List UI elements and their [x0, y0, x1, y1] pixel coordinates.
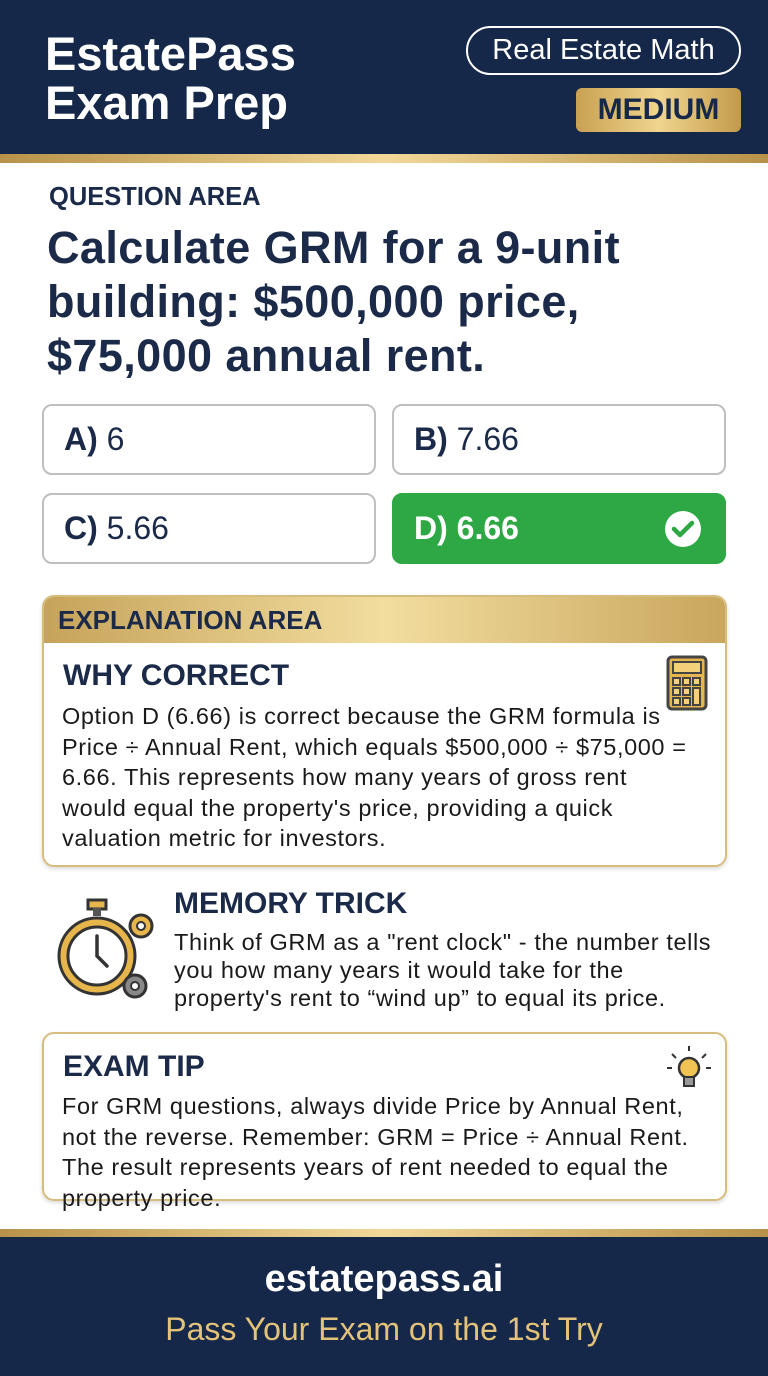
text: exam tip body: property price. [62, 1184, 221, 1210]
text: memory trick body: property's rent to “wind up” to equal its price. [174, 985, 666, 1011]
option A: A) 6 [64, 421, 124, 457]
option B [392, 404, 726, 475]
badge: MEDIUM: MEDIUM [598, 93, 719, 126]
text: exam tip body: not the reverse. Remember: GRM = Price ÷ Annual Rent. [62, 1124, 689, 1150]
panel: exam tip [42, 1032, 727, 1201]
text: why correct body: valuation metric for investors. [62, 825, 386, 851]
text: memory trick body: Think of GRM as a "rent clock" - the number tells [174, 929, 711, 955]
text: memory trick body: you how many years it would take for the [174, 957, 624, 983]
text: exam tip body [62, 1093, 689, 1211]
heading: explanation area: EXPLANATION AREA [58, 605, 322, 635]
footer [0, 1229, 768, 1376]
icon: lightbulb [667, 1046, 711, 1087]
header [0, 0, 768, 163]
heading: question area: QUESTION AREA [49, 183, 261, 211]
heading: why correct: WHY CORRECT [63, 659, 289, 692]
footer: tagline: Pass Your Exam on the 1st Try [165, 1311, 603, 1347]
heading: memory trick: MEMORY TRICK [174, 887, 407, 920]
option D correct [392, 493, 726, 564]
title [45, 27, 296, 129]
text: why correct body: Price ÷ Annual Rent, which equals $500,000 ÷ $75,000 = [62, 734, 687, 760]
text: why correct body: would equal the property's price, providing a quick [62, 794, 613, 820]
text: why correct body: Option D (6.66) is correct because the GRM formula is [62, 703, 661, 729]
heading: exam tip: EXAM TIP [63, 1050, 205, 1083]
text: why correct body [62, 703, 687, 851]
question text: Calculate GRM for a 9-unit [47, 222, 620, 273]
icon: calculator [666, 656, 708, 710]
text: exam tip body: The result represents years of rent needed to equal the [62, 1154, 668, 1180]
option A [42, 404, 376, 475]
question text [47, 222, 620, 381]
icon: stopwatch [58, 898, 154, 998]
text: exam tip body: For GRM questions, always divide Price by Annual Rent, [62, 1093, 683, 1119]
option C: C) 5.66 [64, 510, 169, 546]
title: Exam Prep [45, 76, 288, 129]
icon: check [665, 511, 701, 547]
text: why correct body: 6.66. This represents how many years of gross rent [62, 764, 627, 790]
pill: Real Estate Math: Real Estate Math [492, 34, 715, 66]
panel: explanation [42, 595, 727, 867]
question text: $75,000 annual rent. [47, 330, 485, 381]
badge: MEDIUM [576, 88, 741, 132]
text: memory trick body [174, 929, 711, 1011]
question text: building: $500,000 price, [47, 276, 580, 327]
title: EstatePass [45, 27, 296, 80]
option B: B) 7.66 [414, 421, 519, 457]
heading: explanation area [44, 597, 725, 643]
pill: Real Estate Math [466, 26, 741, 75]
option C [42, 493, 376, 564]
option D correct: D) 6.66 [414, 510, 519, 546]
footer: site: estatepass.ai [265, 1258, 503, 1300]
